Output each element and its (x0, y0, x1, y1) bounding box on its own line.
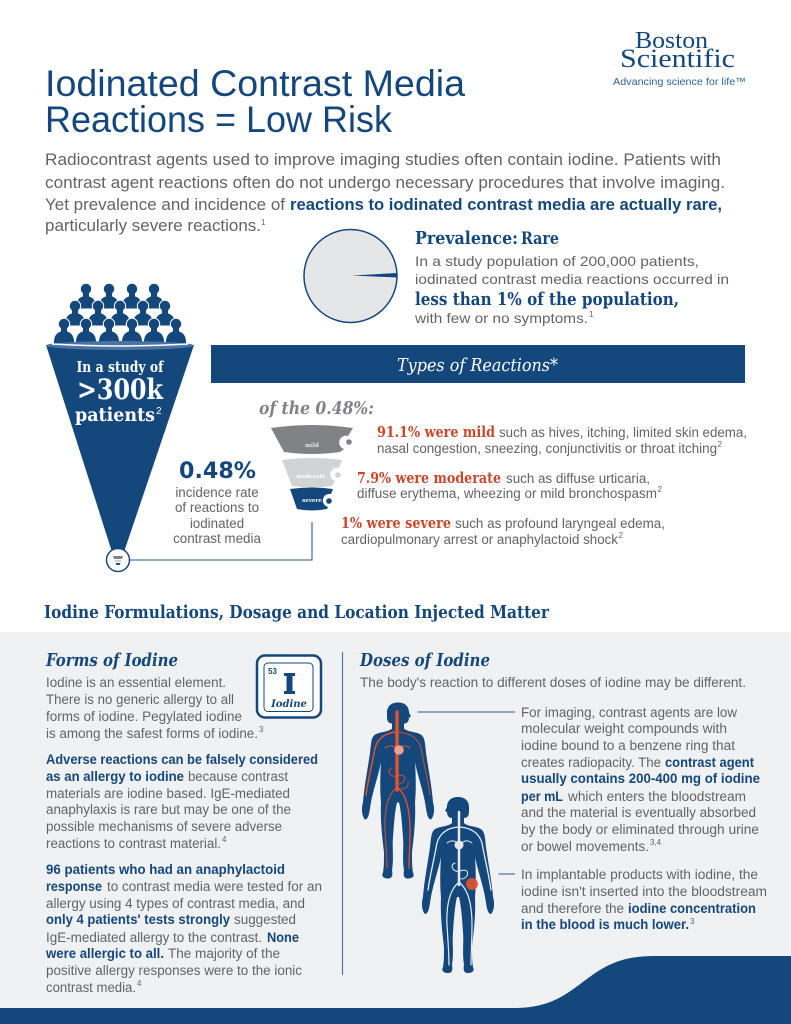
severe reactions text: cardiopulmonary arrest or anaphylactoid shock (341, 532, 618, 547)
prevalence text block: Prevalence: (415, 228, 518, 249)
implant glow (466, 878, 478, 890)
text: adverse reactions: reactions to contrast material. (46, 836, 221, 851)
intro text: particularly severe reactions. (45, 216, 261, 235)
large funnel (46, 341, 194, 552)
icon: periodic table iodine: 53 (268, 667, 277, 676)
white vessels (428, 812, 491, 965)
of the 0.48% label: of the 0.48%: (259, 398, 374, 419)
title (45, 63, 465, 140)
text: 96 patients study: contrast media. (46, 980, 136, 995)
prevalence text block: In a study population of 200,000 patients, (415, 253, 699, 269)
moderate reactions text: such as diffuse urticaria, (506, 471, 650, 486)
text: doses intro: The body's reaction to different doses of iodine may be different. (360, 675, 746, 690)
types of reactions banner: Types of Reactions* (397, 355, 558, 376)
types of reactions banner (211, 345, 745, 383)
pie chart: prevalence under 1% (304, 230, 397, 322)
text: contrast agents: For imaging, contrast agents are low (521, 705, 737, 720)
moderate reactions text: 7.9% were moderate (357, 470, 501, 487)
prevalence text block: 1 (589, 310, 594, 319)
text: contrast agents: by the body or eliminated through urine (521, 822, 759, 837)
intro text (45, 150, 725, 235)
text: implantable products: 3 (690, 917, 695, 926)
text: adverse reactions: Adverse reactions can be falsely considered (46, 752, 318, 767)
leader line: body 1 (418, 711, 515, 713)
text: contrast agents (521, 705, 760, 854)
text: 96 patients study: were allergic to all. (45, 946, 164, 961)
heart (394, 745, 404, 755)
column divider (342, 652, 344, 975)
0.48% incidence callout: contrast media (173, 531, 261, 546)
text: implantable products: iodine isn't inserted into the bloodstream (521, 884, 767, 899)
text: adverse reactions (46, 752, 318, 851)
severe reactions text: 2 (618, 531, 624, 540)
mild reactions text: such as hives, itching, limited skin edema, (499, 425, 747, 440)
text: 96 patients study: response (46, 879, 102, 894)
0.48% incidence callout: 0.48% (179, 459, 256, 484)
panel: grey background (0, 632, 791, 1024)
mild reactions text: 2 (718, 440, 722, 449)
icon: body with contrast in bloodstream (362, 702, 434, 878)
text: contrast agents: per mL (521, 789, 563, 804)
title: Reactions = Low Risk (45, 99, 392, 140)
tier: mild: mild (305, 443, 319, 449)
prevalence text block: Rare (521, 229, 559, 249)
text: contrast agents: and the material is eventually absorbed (521, 805, 756, 820)
text: 96 patients study: None (267, 930, 299, 945)
logo: Boston Scientific: Advancing science for life™ (613, 76, 746, 88)
0.48% incidence callout: of reactions to (175, 500, 259, 515)
prevalence text block (414, 228, 729, 326)
text: implantable products: In implantable products with iodine, the (521, 867, 758, 882)
text: implantable products: in the blood is much lower. (521, 917, 689, 932)
text: contrast agents: 3,4 (650, 838, 662, 847)
severe reactions text: such as profound laryngeal edema, (455, 516, 665, 531)
mild reactions text (377, 424, 747, 456)
text: 96 patients study (45, 862, 322, 995)
funnel tip icon (106, 548, 130, 572)
text: contrast agents: usually contains 200-400 mg of iodine (521, 771, 760, 786)
icon: periodic table iodine (257, 656, 321, 718)
intro text: reactions to iodinated contrast media are actually rare, (290, 195, 722, 214)
text: contrast agents: molecular weight compounds with (521, 721, 727, 736)
text: 96 patients study: 96 patients who had an anaphylactoid (46, 862, 285, 877)
text: iodine is essential: forms of iodine. Pegylated iodine (46, 709, 242, 724)
mild reactions text: nasal congestion, sneezing, conjunctivitis or throat itching (377, 441, 717, 456)
text: 96 patients study: The majority of the (168, 946, 280, 961)
moderate reactions text: 2 (658, 485, 662, 494)
0.48% incidence callout: incidence rate (175, 485, 259, 500)
intro text: 1 (261, 218, 266, 227)
text: contrast agents: contrast agent (665, 755, 755, 770)
text: 96 patients study: IgE-mediated allergy to the contrast. (46, 930, 262, 945)
text: adverse reactions: possible mechanisms of severe adverse (46, 819, 282, 834)
intro text: contrast agent reactions often do not undergo necessary procedures that involve imaging. (45, 173, 725, 192)
prevalence text block: iodinated contrast media reactions occurred in (415, 271, 729, 287)
icon: body with implant (422, 797, 494, 973)
text: 96 patients study: only 4 patients' tests strongly (46, 912, 231, 927)
text: contrast agents: which enters the bloodstream (567, 789, 746, 804)
0.48% incidence callout (173, 459, 261, 546)
large funnel: >300k (77, 373, 164, 406)
0.48% incidence callout: iodinated (190, 516, 244, 531)
text: implantable products (521, 867, 767, 932)
text: adverse reactions: anaphylaxis is rare but may be one of the (46, 802, 291, 817)
text: iodine is essential (46, 675, 264, 741)
logo: Boston Scientific: Boston (635, 28, 708, 54)
text: adverse reactions: as an allergy to iodine (46, 769, 184, 784)
intro text: Yet prevalence and incidence of (45, 195, 285, 214)
orange blood vessels (366, 712, 430, 868)
tier: moderate: moderate (296, 474, 326, 480)
text: 96 patients study: suggested (234, 912, 296, 927)
people crowd icon (53, 283, 187, 344)
logo: Boston Scientific (613, 28, 746, 88)
connector line from funnel to severe reactions (129, 522, 312, 560)
heading: doses of iodine: Doses of Iodine (359, 650, 490, 671)
footer wave (0, 956, 791, 1024)
logo: Boston Scientific: Scientific (620, 44, 735, 73)
text: implantable products: and therefore the (521, 901, 624, 916)
large funnel: patients (75, 404, 155, 426)
tier: severe: severe (302, 498, 322, 504)
large funnel: 2 (156, 406, 162, 417)
leader line: body 2 (498, 873, 515, 875)
title: Iodinated Contrast Media (45, 63, 465, 104)
severe reactions text: 1% were severe (341, 515, 451, 532)
text: adverse reactions: materials are iodine based. IgE-mediated (46, 786, 290, 801)
text: iodine is essential: There is no generic allergy to all (46, 692, 234, 707)
small funnel: severity tiers (271, 425, 353, 510)
text: adverse reactions: because contrast (188, 769, 288, 784)
text: iodine is essential: 3 (259, 725, 264, 734)
icon: periodic table iodine: Iodine (270, 699, 307, 710)
moderate reactions text (357, 470, 662, 501)
section heading: Iodine Formulations, Dosage and Location Injected Matter (44, 602, 549, 623)
text: 96 patients study: 4 (137, 979, 142, 988)
prevalence text block: with few or no symptoms. (414, 310, 588, 326)
moderate reactions text: diffuse erythema, wheezing or mild bronchospasm (357, 486, 657, 501)
prevalence text block: less than 1% of the population, (415, 289, 679, 310)
text: 96 patients study: positive allergy responses were to the ionic (46, 963, 302, 978)
intro text: Radiocontrast agents used to improve imaging studies often contain iodine. Patients with (45, 150, 721, 169)
text: contrast agents: creates radiopacity. The (521, 755, 661, 770)
mild reactions text: 91.1% were mild (377, 424, 495, 441)
large funnel: In a study of (76, 358, 165, 376)
text: iodine is essential: is among the safest forms of iodine. (46, 726, 258, 741)
text: contrast agents: iodine bound to a benzene ring that (521, 738, 735, 753)
text: 96 patients study: to contrast media were tested for an (107, 879, 322, 894)
text: 96 patients study: allergy using 4 types of contrast media, and (46, 896, 305, 911)
heading: forms of iodine: Forms of Iodine (45, 650, 178, 671)
text: implantable products: iodine concentration (628, 901, 756, 916)
text: adverse reactions: 4 (222, 835, 227, 844)
text: iodine is essential: Iodine is an essential element. (46, 675, 226, 690)
severe reactions text (341, 515, 665, 547)
text: contrast agents: or bowel movements. (521, 839, 649, 854)
